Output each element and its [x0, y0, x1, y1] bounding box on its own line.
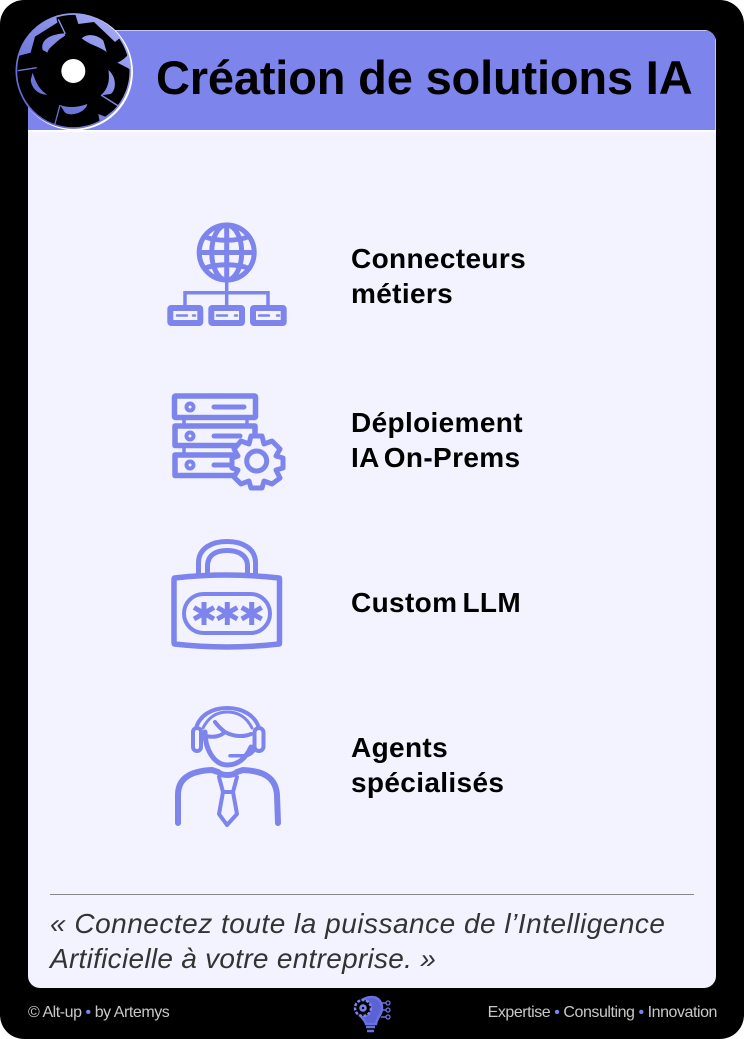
icon: servers with gear — [172, 393, 286, 490]
logo: gear medallion — [16, 13, 133, 130]
icon: support agent — [175, 706, 281, 828]
label: Agents spécialisés: spécialisés — [351, 767, 504, 798]
label: Connecteurs métiers: métiers — [351, 278, 453, 309]
label: Agents spécialisés — [351, 732, 504, 798]
label: Connecteurs métiers — [351, 243, 526, 309]
quote: « Connectez toute la puissance de l’Intelligence — [50, 908, 666, 939]
label: Déploiement IA On-Prems — [351, 407, 523, 473]
label: Déploiement IA On-Prems: IA On-Prems — [351, 442, 520, 473]
header band — [28, 30, 716, 132]
label: Custom LLM: Custom LLM — [351, 587, 521, 618]
quote: Artificielle à votre entreprise. » — [50, 943, 436, 974]
footer right: Expertise • Consulting • Innovation — [488, 1004, 717, 1021]
label: Déploiement IA On-Prems: Déploiement — [351, 407, 523, 438]
icon: globe network — [167, 222, 287, 326]
label: Connecteurs métiers: Connecteurs — [351, 243, 526, 274]
title: Création de solutions IA — [156, 51, 692, 104]
label: Agents spécialisés: Agents — [351, 732, 448, 763]
footer left: © Alt-up • by Artemys — [28, 1004, 169, 1021]
quote — [48, 908, 666, 974]
icon: padlock with password — [171, 539, 282, 650]
footer logo: light bulb — [354, 996, 391, 1032]
